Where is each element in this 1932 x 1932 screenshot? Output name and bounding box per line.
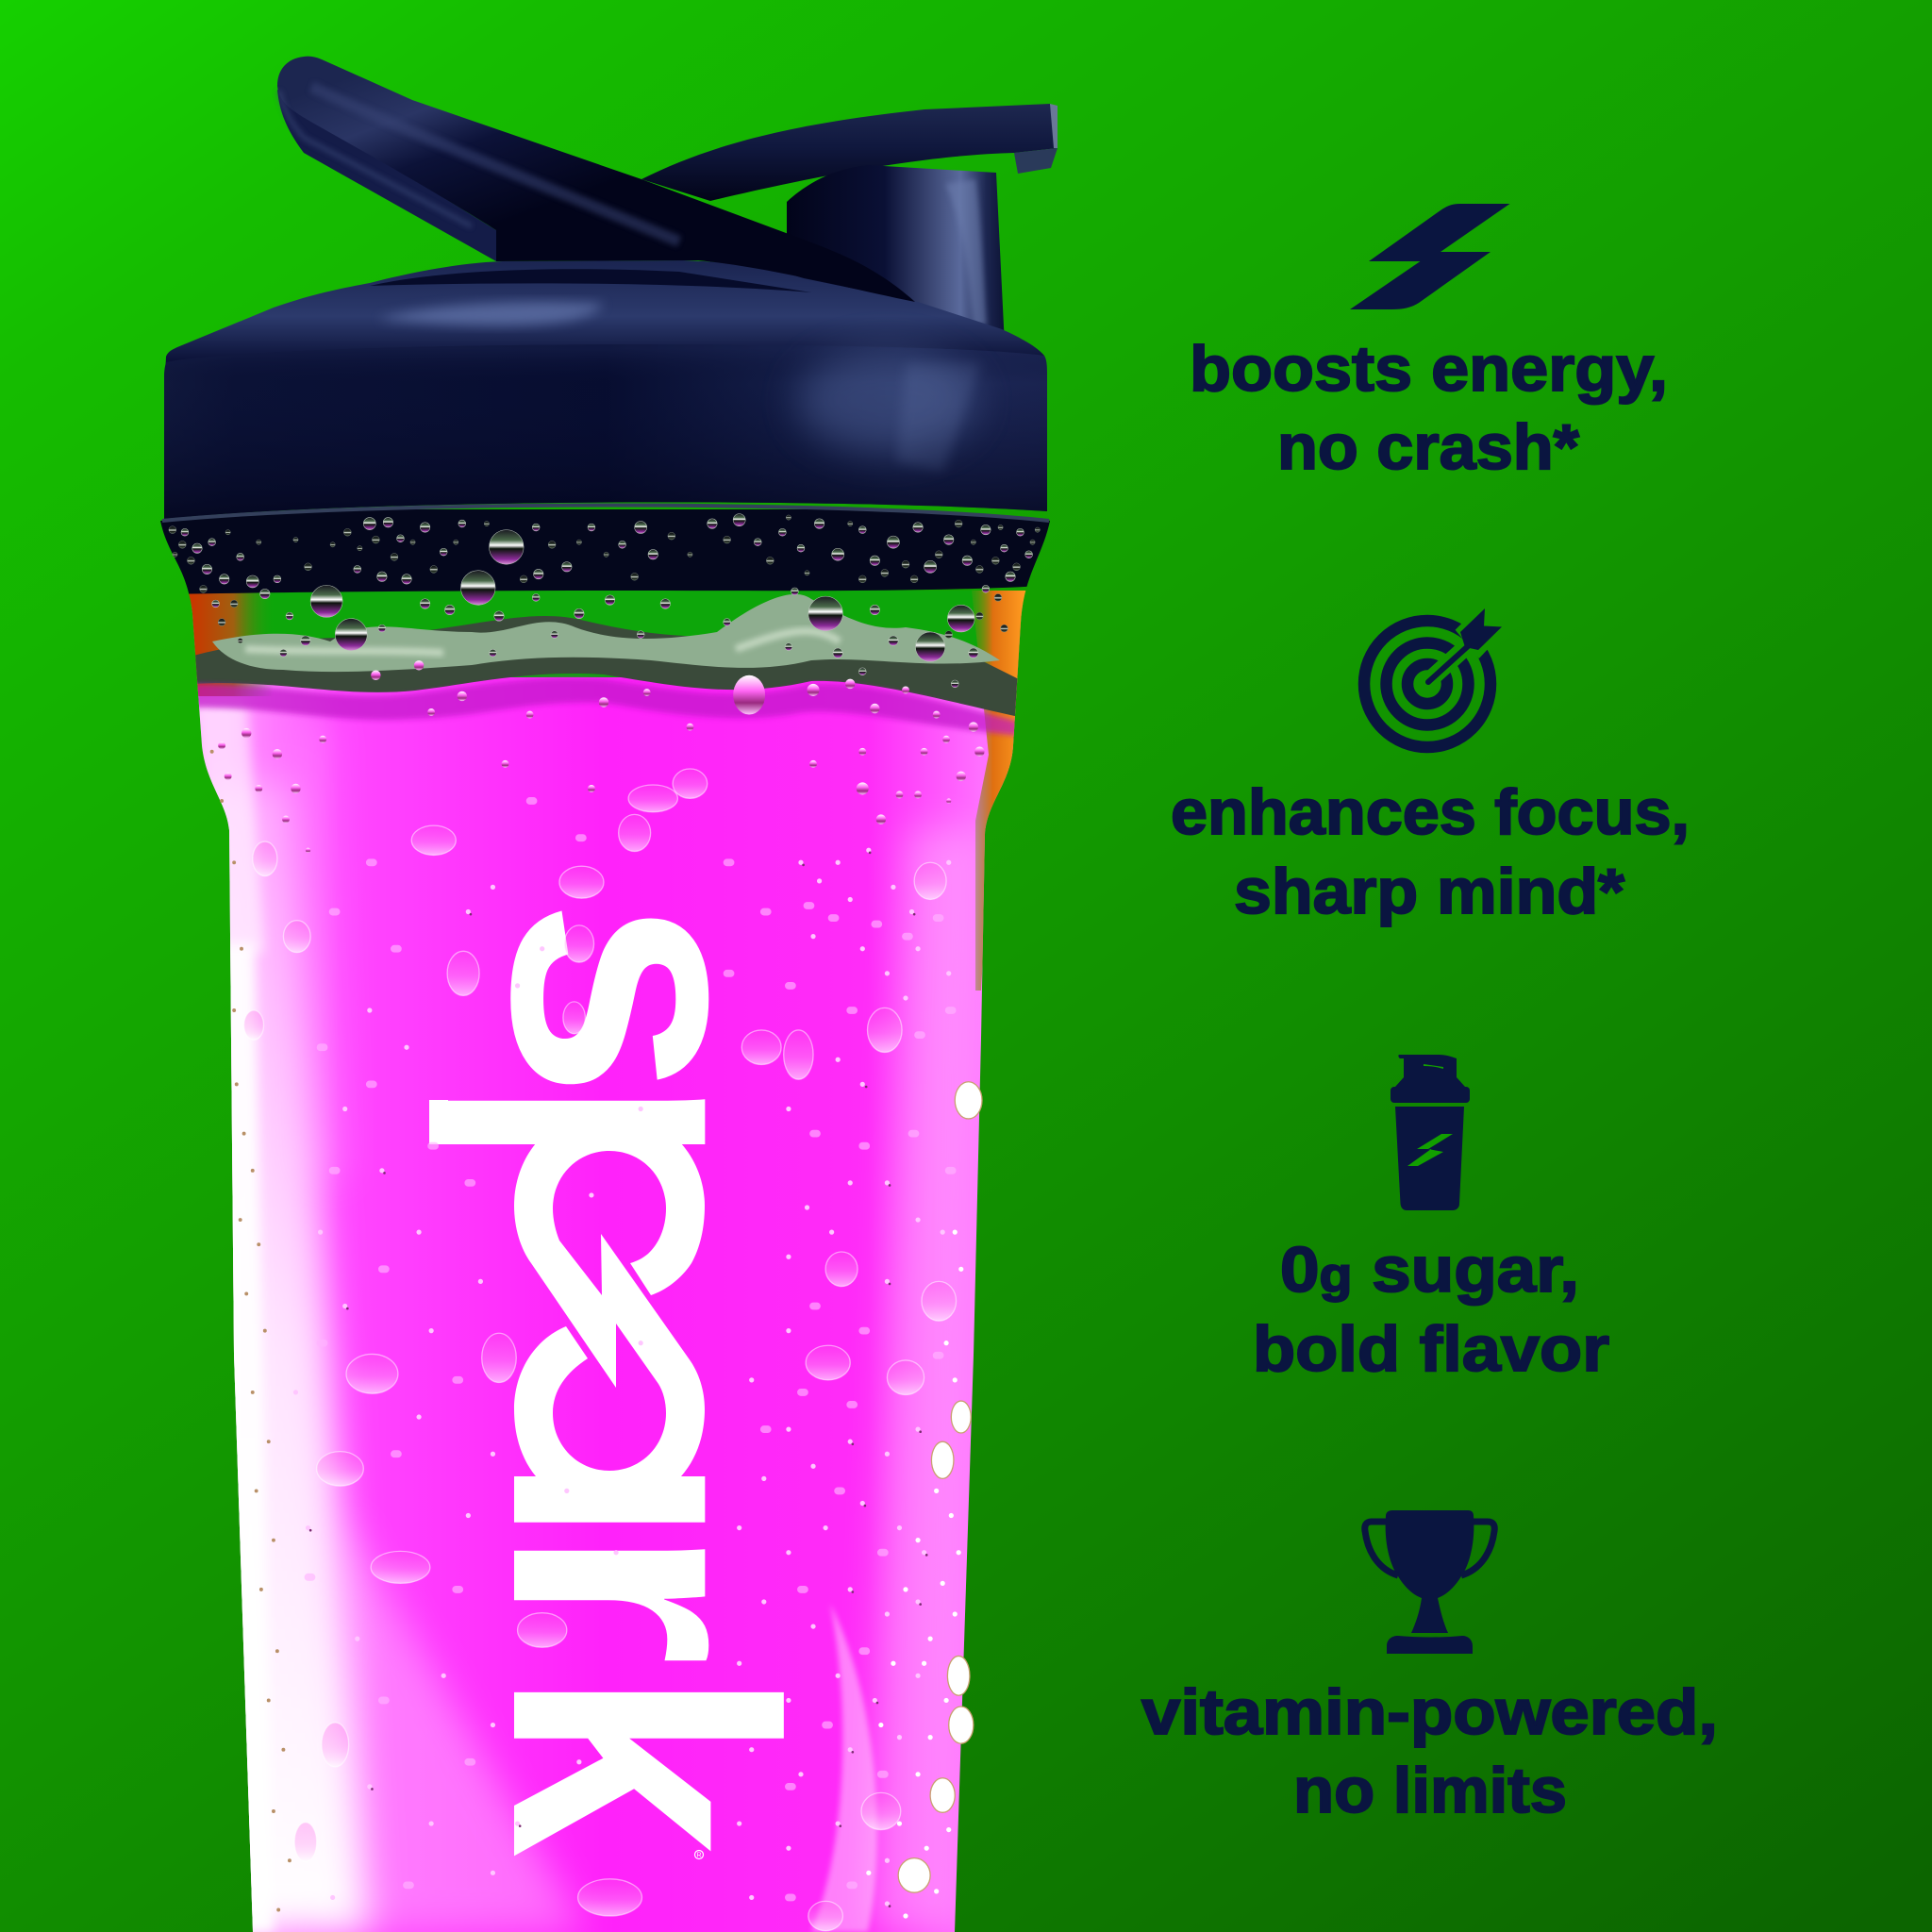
rim highlight: [162, 506, 1049, 521]
wordmark: [425, 898, 851, 1858]
lid dome: [164, 260, 1047, 396]
benefit: focus: [1171, 608, 1690, 927]
heading: boosts energy: boosts energy,: [1190, 333, 1668, 405]
white fade on the left side: [212, 783, 368, 1932]
heading: 0g sugar: bold flavor: [1253, 1313, 1609, 1385]
collar bubbles: [181, 514, 1033, 688]
foam wave dark: [193, 616, 1019, 717]
fine dark specks: [310, 853, 926, 1907]
magenta liquid: [151, 604, 1057, 1932]
more fine bubbles: [308, 801, 953, 1897]
white edge specks right: [869, 1232, 961, 1916]
edge reflections: [189, 591, 274, 696]
shaded liquid surface: [193, 678, 1019, 736]
spout: [787, 165, 1008, 396]
dense dark collar bubbles: [169, 515, 1040, 643]
droplets: [244, 769, 957, 1931]
benefit: sugar: [1253, 1055, 1609, 1385]
descender extension: [429, 1100, 448, 1145]
heading: vitamin-powered: vitamin-powered,: [1141, 1676, 1718, 1748]
heading: vitamin-powered: no limits: [1293, 1755, 1567, 1826]
logo lettering: p: [435, 1075, 841, 1296]
heading: 0g sugar: [1253, 1234, 1609, 1385]
tan edge specks left: [212, 752, 290, 1909]
main lid: [164, 344, 1047, 519]
right strap: [641, 104, 1058, 201]
logo lettering: ɑ: [431, 1302, 837, 1552]
heading: 0g sugar: 0g sugar,: [1280, 1234, 1579, 1306]
heading: enhances focus: [1171, 776, 1690, 927]
icon: trophy: [1365, 1510, 1494, 1654]
benefit: energy: [1190, 204, 1668, 483]
icon: shaker: [1391, 1055, 1470, 1210]
liquid backing behind the bolt ligature: [425, 1144, 717, 1476]
logo lettering: s: [437, 898, 841, 1099]
bright edge droplets: [898, 1082, 982, 1892]
bubbles and droplets: [169, 514, 1040, 1931]
foam wave light: [212, 594, 1000, 672]
bottle: [151, 57, 1058, 1932]
icon: lightning bolt: [1350, 204, 1509, 309]
green window band: [151, 591, 1057, 677]
vertical streaks: [300, 717, 349, 1179]
surface bubbles: [218, 660, 985, 853]
bolt ligature joining two bowls: [514, 1143, 705, 1476]
registered mark: [694, 1851, 704, 1858]
foam wave group: [193, 594, 1019, 736]
dark collar band: [151, 509, 1057, 594]
registered mark: R: [696, 1853, 702, 1858]
bottle glass and liquid: [151, 509, 1057, 1932]
left flap strap behind: [277, 90, 496, 261]
icon: target with arrow: [1364, 608, 1502, 747]
heading: boosts energy: no crash*: [1277, 411, 1580, 483]
logo lettering: r: [437, 1525, 841, 1666]
benefit: vitamins: [1141, 1510, 1718, 1826]
heading: boosts energy: [1190, 333, 1668, 483]
big flap strap front: [277, 57, 915, 302]
heading: enhances focus: enhances focus,: [1171, 776, 1690, 848]
heading: enhances focus: sharp mind*: [1234, 856, 1625, 927]
heading: vitamin-powered: [1141, 1676, 1718, 1826]
logo letter k: k: [435, 1669, 851, 1857]
fine light bubbles: [295, 850, 949, 1904]
